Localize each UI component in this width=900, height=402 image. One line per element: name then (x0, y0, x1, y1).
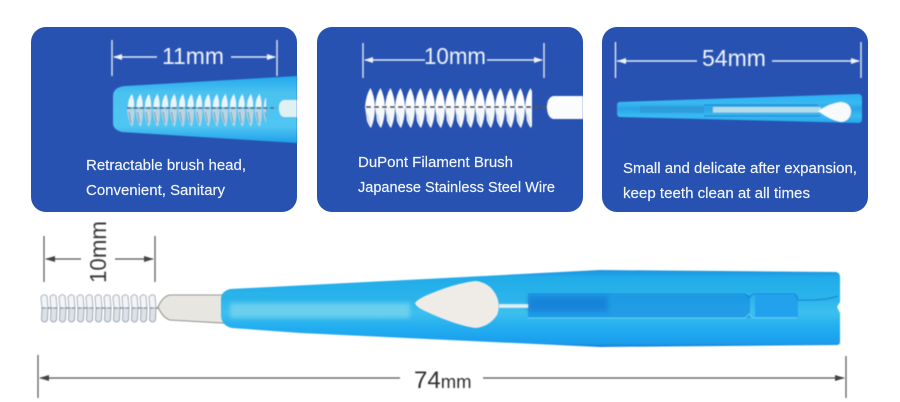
icon: brush stem (158, 295, 224, 323)
icon: exposed brush head (365, 87, 583, 129)
panel: DuPont filament brush (317, 27, 583, 212)
dimension: 11mm (112, 40, 277, 76)
caption: small and delicate (623, 161, 857, 202)
dimension: 11mm: 11mm (162, 43, 224, 69)
icon: closed tube (617, 94, 862, 123)
caption: retractable brush head (86, 158, 246, 199)
panel: retractable brush head (31, 27, 297, 212)
caption: small and delicate: Small and delicate after expansion, (623, 161, 857, 177)
caption: retractable brush head: Convenient, Sanitary (86, 183, 226, 199)
caption: small and delicate: keep teeth clean at all times (623, 186, 810, 202)
main product: interdental brush (40, 270, 840, 347)
caption: filament and steel wire (358, 155, 555, 196)
dimension: 10mm brush length (44, 221, 155, 283)
dimension: 74mm total length: 74mm (414, 367, 472, 394)
dimension: 10mm (363, 43, 544, 78)
panel: small and delicate (602, 27, 868, 212)
caption: filament and steel wire: DuPont Filament Brush (358, 155, 513, 171)
caption: retractable brush head: Retractable brush head, (86, 158, 246, 174)
dimension: 10mm brush length: 10mm (85, 221, 111, 283)
caption: filament and steel wire: Japanese Stainless Steel Wire (358, 180, 555, 196)
dimension: 10mm: 10mm (424, 43, 486, 69)
dimension: 54mm: 54mm (702, 45, 766, 71)
dimension: 74mm total length (38, 355, 846, 398)
icon: brush inside blue tube (113, 76, 297, 143)
icon: teardrop slider (415, 281, 499, 328)
icon: blue handle (221, 270, 840, 347)
dimension: 54mm (616, 42, 861, 78)
icon: coil brush (40, 293, 160, 324)
